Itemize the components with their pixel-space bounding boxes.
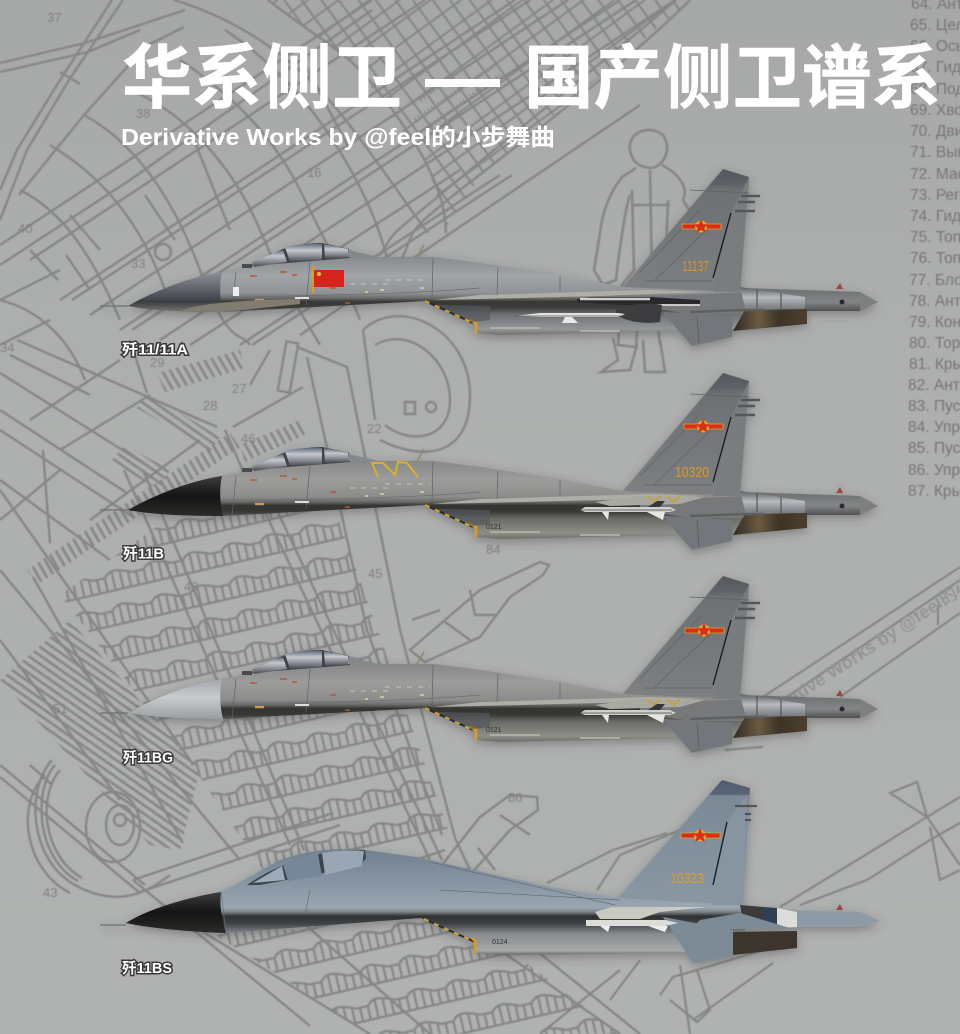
radome xyxy=(128,272,223,312)
Russian parts list: 85. Пус xyxy=(908,440,960,457)
belly fairing xyxy=(180,299,300,312)
lattice: upper fuselage frames xyxy=(0,0,690,380)
Russian parts list: 80. Тор xyxy=(909,335,960,352)
Russian parts list: 76. Топ xyxy=(910,250,960,267)
blueprint numbers: 29 xyxy=(150,355,164,370)
blueprint: missile centre xyxy=(410,562,549,662)
stabilizer xyxy=(663,913,790,963)
jet 1: J-11/11A xyxy=(100,169,878,346)
canopy xyxy=(247,850,366,885)
blueprint numbers: 37 xyxy=(47,10,61,25)
Russian parts list: 79. Кон xyxy=(909,314,960,331)
blueprint numbers: 84 xyxy=(486,542,500,557)
radome xyxy=(128,476,223,516)
Russian parts list: 84. Упр xyxy=(908,419,960,436)
subtitle: Derivative Works by @feel的小步舞曲 xyxy=(121,124,555,150)
serial: 0121 xyxy=(486,727,502,734)
blueprint numbers: 48 xyxy=(184,579,198,594)
radome xyxy=(126,892,226,933)
Russian parts list: 82. Ант xyxy=(908,377,960,394)
blueprint numbers: 22 xyxy=(367,421,381,436)
tail number: 11137 xyxy=(682,258,709,275)
radome xyxy=(128,679,223,719)
Russian parts list: 75. Топ xyxy=(910,229,960,246)
Russian parts list: 73. Рег xyxy=(910,187,960,204)
tail boom xyxy=(777,910,880,927)
fin insignia xyxy=(685,623,724,637)
blueprint numbers: 16 xyxy=(307,165,321,180)
blueprint numbers: 28 xyxy=(203,398,217,413)
lattice: dense upper frames xyxy=(268,0,690,227)
blueprint: missile lower centre xyxy=(430,795,538,892)
blueprint: missile below lower jet xyxy=(660,947,773,1022)
label: J-11BG: 歼11BG xyxy=(123,750,173,766)
lattice: cooling cell panel xyxy=(60,475,450,880)
jet 3: J-11BG xyxy=(100,576,878,753)
fin xyxy=(618,780,757,905)
blueprint numbers: 40 xyxy=(18,221,32,236)
serial: 0124 xyxy=(492,939,508,946)
main gear door strip xyxy=(424,919,475,953)
title: 华系侧卫 xyxy=(122,39,402,117)
blueprint: missile behind lower fin xyxy=(540,830,690,1034)
blueprint numbers: 43 xyxy=(43,885,57,900)
blueprint: missile bottom right xyxy=(780,782,960,907)
label: J-11/11A: 歼11/11A xyxy=(122,342,188,358)
jet 4: J-11BS xyxy=(100,780,880,963)
lattice: lower cell panel xyxy=(200,890,620,1034)
tail number: 10323 xyxy=(670,870,704,887)
wing and panels xyxy=(221,862,620,933)
blueprint numbers: 15 xyxy=(425,126,439,141)
label: J-11BS: 歼11BS xyxy=(122,960,172,977)
lattice: hatched bands xyxy=(27,350,305,585)
Russian parts list xyxy=(908,0,960,500)
national flag xyxy=(312,266,344,293)
fin insignia xyxy=(684,419,723,433)
serial: 0121 xyxy=(486,524,502,531)
tail number: 10320 xyxy=(675,464,709,481)
blueprint numbers: 33 xyxy=(131,256,145,271)
blueprint numbers: 51 xyxy=(53,701,67,716)
Russian parts list: 67. Гид xyxy=(910,59,960,76)
fuselage xyxy=(126,849,745,955)
nozzle and tail xyxy=(100,904,843,955)
fin insignia xyxy=(682,219,721,233)
white panel xyxy=(233,287,239,296)
label: J-11B: 歼11B xyxy=(123,546,164,562)
blueprint numbers: 86 xyxy=(508,790,522,805)
lattice: hatched panel by wheel xyxy=(0,620,200,850)
fin insignia xyxy=(681,828,720,842)
blueprint numbers: 27 xyxy=(232,381,246,396)
Russian parts list: 86. Упр xyxy=(908,462,960,479)
blueprint: pilot figure xyxy=(594,130,692,372)
blueprint: stripe with watermark xyxy=(725,567,960,750)
missiles xyxy=(515,297,700,323)
blueprint numbers: 34 xyxy=(0,340,14,355)
blueprint numbers: 45 xyxy=(368,566,382,581)
jet 2: J-11B xyxy=(100,373,878,550)
Russian parts list: 74. Гид xyxy=(910,208,960,225)
Russian parts list: 83. Пус xyxy=(908,398,960,415)
missiles xyxy=(580,699,705,723)
blueprint numbers: 46 xyxy=(241,431,255,446)
Russian parts list: 78. Ант xyxy=(909,293,960,310)
missiles xyxy=(580,496,705,520)
lattice: ribs and struts xyxy=(0,316,640,1034)
yellow marking xyxy=(372,462,418,477)
title: 国产侧卫谱系 xyxy=(524,39,941,117)
blueprint numbers: 38 xyxy=(136,106,150,121)
blueprint: landing gear wheel xyxy=(28,760,170,897)
missiles xyxy=(586,907,707,932)
blueprint numbers xyxy=(0,10,522,900)
title xyxy=(122,39,941,117)
